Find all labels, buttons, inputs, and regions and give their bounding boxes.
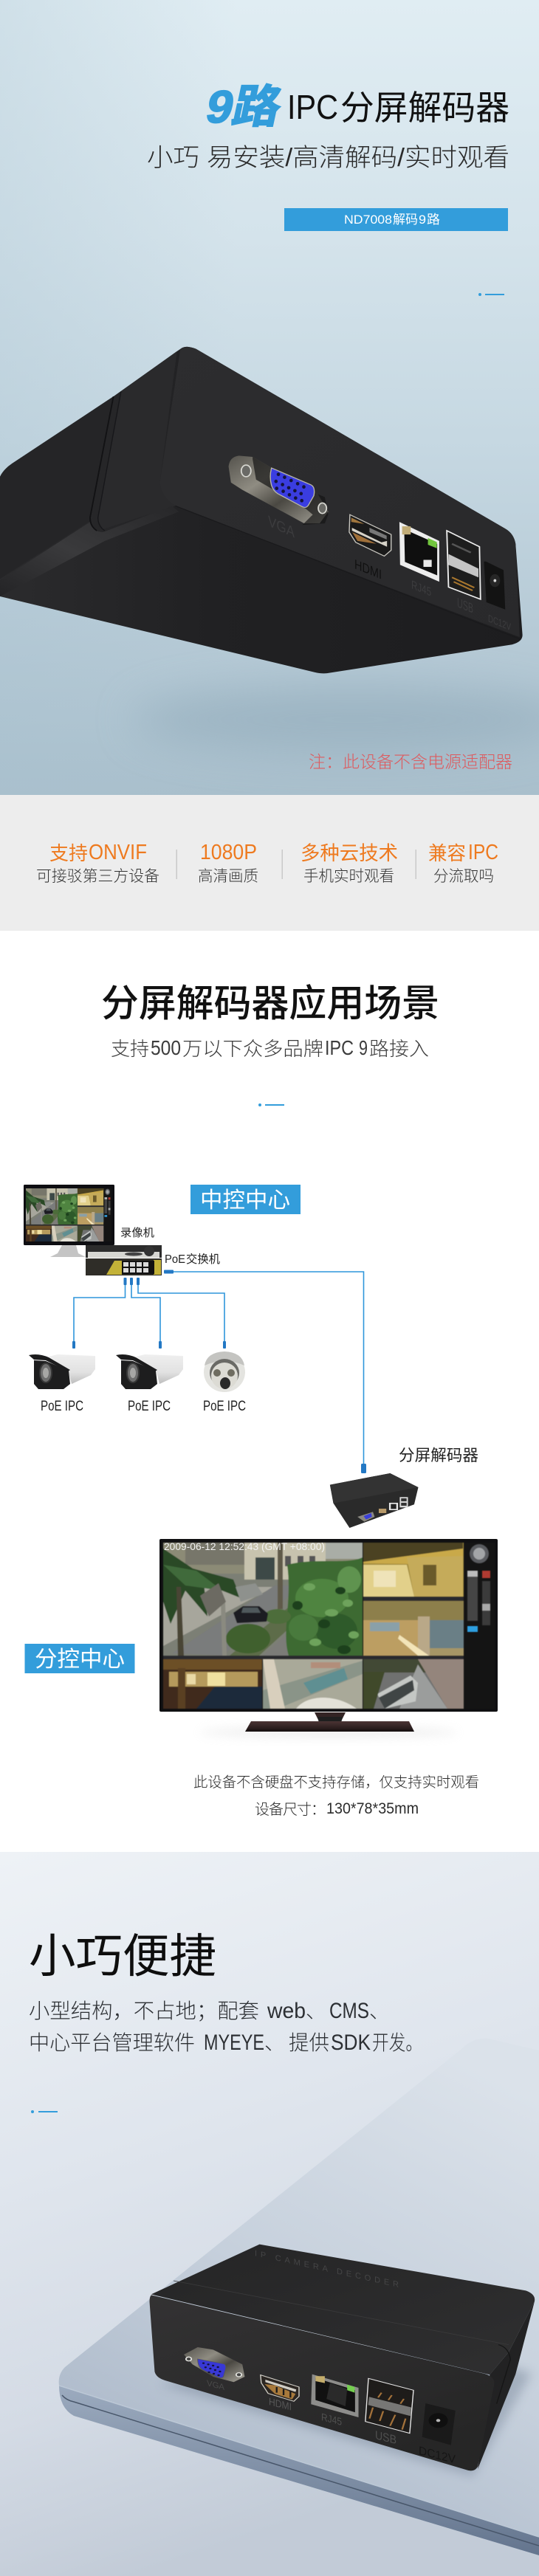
- camera: dome: [204, 1351, 245, 1392]
- text: description: 开发。: [372, 2031, 422, 2054]
- text: description: 、: [264, 2031, 285, 2054]
- shadow under bottom device: [159, 2347, 532, 2476]
- note: device size: 设备尺寸：: [255, 1801, 326, 1818]
- label: PoE switch: [165, 1253, 220, 1266]
- feature: cloud: [301, 842, 398, 885]
- port: DC power: [422, 2403, 456, 2445]
- feature: ONVIF: ONVIF: [89, 841, 147, 864]
- note: device size: [255, 1800, 419, 1818]
- port: HDMI: [349, 514, 391, 556]
- product render: bottom decoder: [149, 2245, 535, 2470]
- feature: 1080P: [198, 841, 258, 885]
- camera labels: [41, 1399, 246, 1414]
- device front face: [149, 2295, 494, 2470]
- device silhouette: [0, 347, 523, 673]
- device: PoE switch: [86, 1258, 162, 1275]
- port: RJ45: [311, 2374, 359, 2417]
- model badge: 路: [427, 213, 440, 227]
- port: USB: [447, 531, 481, 599]
- subheading: 支持: [111, 1038, 149, 1060]
- text: description: 提供: [289, 2031, 329, 2054]
- text: description: web: [267, 1999, 306, 2023]
- label: PoE switch: 交换机: [186, 1253, 220, 1266]
- title: product name: 分屏解码器: [340, 89, 509, 127]
- note: no power adapter: 注：此设备不含电源适配器: [309, 752, 512, 771]
- camera: bullet 2: [116, 1354, 183, 1389]
- subtitle: 小巧 易安装/高清解码/实时观看: [147, 144, 509, 172]
- feature: ONVIF: [36, 841, 159, 885]
- device: small decoder: [330, 1473, 419, 1528]
- feature: ONVIF: 支持: [49, 842, 88, 864]
- text: description: [29, 1999, 422, 2055]
- subheading: 路接入: [369, 1038, 429, 1060]
- port: HDMI: [261, 2375, 299, 2401]
- subheading: 500: [151, 1036, 181, 1059]
- camera labels: PoE IPC: [203, 1399, 246, 1414]
- subheading: IPC: [325, 1036, 354, 1059]
- title: compact: 小巧便捷: [29, 1931, 216, 1983]
- port labels: hero: [268, 513, 511, 633]
- camera: bullet 1: [29, 1354, 95, 1389]
- cables: [74, 1272, 363, 1464]
- panel: hero background: [0, 0, 539, 795]
- shadow under hero device: [133, 686, 539, 753]
- feature: ONVIF: 可接驳第三方设备: [36, 868, 159, 885]
- camera labels: PoE IPC: [128, 1399, 171, 1414]
- title: 9路 accent: 9路: [202, 82, 286, 133]
- model badge: 解码: [393, 213, 418, 227]
- device lettering: IP CAMERA DECODER: [255, 2249, 399, 2290]
- camera labels: PoE IPC: [41, 1399, 83, 1414]
- timestamp: 2009-06-12 12:52:43 (GMT +08:00): [164, 1540, 325, 1552]
- accent dash: compact: [31, 2110, 58, 2113]
- badge: sub-control: [25, 1644, 134, 1673]
- label: NVR: 录像机: [120, 1227, 154, 1239]
- heading: application scenarios: 分屏解码器应用场景: [101, 982, 439, 1024]
- title: product name: IPC: [287, 88, 338, 126]
- port: VGA: [229, 455, 329, 525]
- diagram: network topology: [24, 1185, 498, 1738]
- feature: 1080P: 高清画质: [198, 868, 258, 885]
- port labels: hero: RJ45: [411, 578, 431, 599]
- port labels: bottom: RJ45: [321, 2411, 342, 2428]
- text: description: 、: [369, 2000, 390, 2022]
- panel: feature strip: [0, 795, 539, 931]
- feature: IPC: 兼容: [428, 842, 466, 864]
- port labels: bottom: USB: [375, 2428, 396, 2447]
- port labels: bottom: HDMI: [269, 2396, 292, 2414]
- accent dash: scenarios: [258, 1103, 284, 1106]
- device left side: [0, 396, 114, 579]
- text: description: 、: [306, 2000, 326, 2022]
- feature: IPC: IPC: [468, 841, 498, 864]
- text: description: MYEYE: [204, 2031, 264, 2055]
- badge: sub-control: 分控中心: [35, 1647, 125, 1672]
- accent dash: hero: [478, 293, 504, 296]
- feature: cloud: 多种云技术: [301, 842, 398, 864]
- port: USB: [365, 2378, 413, 2434]
- monitor: sub-control: [159, 1539, 498, 1738]
- feature: 1080P: 1080P: [200, 841, 257, 864]
- port labels: bottom: VGA: [207, 2379, 225, 2392]
- cable connectors: [72, 1270, 366, 1473]
- port: RJ45: [399, 522, 439, 582]
- feature: cloud: 手机实时观看: [303, 868, 394, 885]
- feature: IPC: 分流取吗: [433, 868, 494, 885]
- port: VGA: [184, 2347, 244, 2382]
- port labels: bottom: [207, 2379, 456, 2466]
- badge: central control: 中控中心: [200, 1188, 290, 1213]
- text: description: 小型结构，不占地；配套: [29, 2000, 259, 2022]
- device right face: [478, 2301, 535, 2469]
- badge: central control: [190, 1185, 301, 1214]
- feature: IPC: [428, 841, 498, 885]
- note: no storage: 此设备不含硬盘不支持存储，仅支持实时观看: [193, 1774, 479, 1791]
- port labels: hero: VGA: [268, 513, 295, 541]
- subheading: 9: [359, 1036, 368, 1059]
- text: description: SDK: [331, 2031, 371, 2055]
- model badge: 9: [419, 213, 426, 227]
- label: decoder: 分屏解码器: [399, 1446, 478, 1464]
- label: PoE switch: PoE: [165, 1253, 185, 1266]
- subheading: [111, 1036, 429, 1060]
- subheading: 万以下众多品牌: [182, 1038, 323, 1060]
- note: device size: 130*78*35mm: [326, 1800, 419, 1817]
- model badge: [284, 208, 508, 231]
- panel: compact section background: [0, 1852, 539, 2576]
- monitor: central: [24, 1185, 114, 1257]
- plate: laptop surface: [59, 2039, 539, 2555]
- product render: hero decoder: [0, 347, 523, 673]
- device: NVR: [86, 1245, 162, 1258]
- text: description: CMS: [329, 1999, 369, 2023]
- port labels: hero: DC12V: [488, 613, 511, 633]
- device front panel: [159, 347, 520, 637]
- port labels: bottom: DC12V: [419, 2444, 456, 2466]
- port labels: hero: HDMI: [354, 557, 382, 582]
- device top face: [151, 2245, 535, 2374]
- port: DC power: [484, 562, 505, 610]
- text: description: 中心平台管理软件: [29, 2031, 195, 2054]
- port labels: hero: USB: [457, 595, 473, 616]
- model badge: ND7008: [344, 213, 392, 227]
